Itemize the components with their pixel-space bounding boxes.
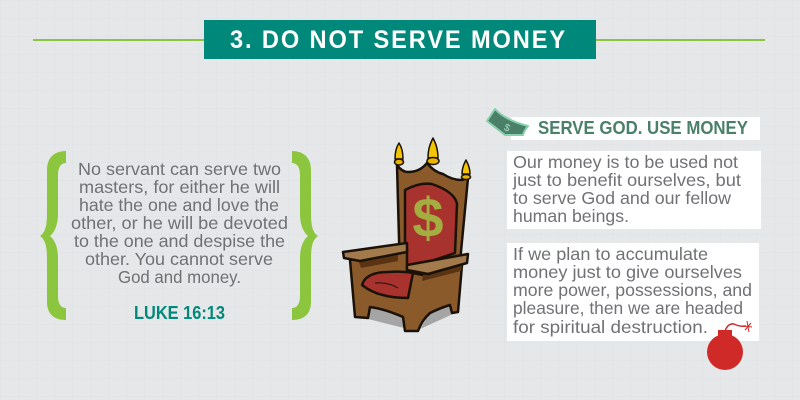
quote text: to the one and despise the bbox=[74, 231, 285, 251]
text block: use of money: Our money is to be used not bbox=[513, 152, 738, 172]
title text: 3. DO NOT SERVE MONEY bbox=[230, 26, 567, 54]
scripture reference: LUKE 16:13 bbox=[134, 303, 225, 323]
icon: right brace bbox=[292, 151, 318, 320]
text block: warning bbox=[507, 243, 759, 341]
text block: warning: for spiritual destruction. bbox=[513, 317, 708, 337]
quote text: other. You cannot serve bbox=[85, 249, 273, 269]
text block: use of money: to serve God and our fellow bbox=[513, 188, 731, 208]
quote text: God and money. bbox=[118, 267, 241, 287]
text block: warning: money just to give ourselves bbox=[513, 262, 742, 282]
text block: warning: pleasure, then we are headed bbox=[513, 298, 743, 318]
title banner bbox=[33, 20, 765, 59]
quote text: No servant can serve two bbox=[78, 159, 281, 179]
text block: warning: If we plan to accumulate bbox=[513, 244, 708, 264]
icon: left brace bbox=[40, 151, 66, 320]
quote text: hate the one and love the bbox=[79, 195, 279, 215]
icon: dollar bill: $ bbox=[502, 122, 512, 135]
icon: throne with dollar sign bbox=[343, 138, 470, 331]
quote text: masters, for either he will bbox=[79, 177, 280, 197]
text block: use of money: just to benefit ourselves, but bbox=[512, 170, 741, 190]
panel: serve God, use money bbox=[487, 109, 761, 370]
icon: throne with dollar sign: $ bbox=[412, 186, 444, 249]
text block: use of money bbox=[507, 151, 761, 229]
quote text bbox=[71, 159, 288, 287]
icon: bomb bbox=[707, 321, 752, 370]
text block: use of money: human beings. bbox=[513, 206, 629, 226]
heading bar: SERVE GOD. USE MONEY bbox=[538, 118, 748, 138]
icon: dollar bill bbox=[487, 109, 528, 135]
text block: warning: more power, possessions, and bbox=[513, 280, 752, 300]
quote text: other, or he will be devoted bbox=[71, 213, 288, 233]
panel: scripture quote bbox=[40, 151, 318, 323]
